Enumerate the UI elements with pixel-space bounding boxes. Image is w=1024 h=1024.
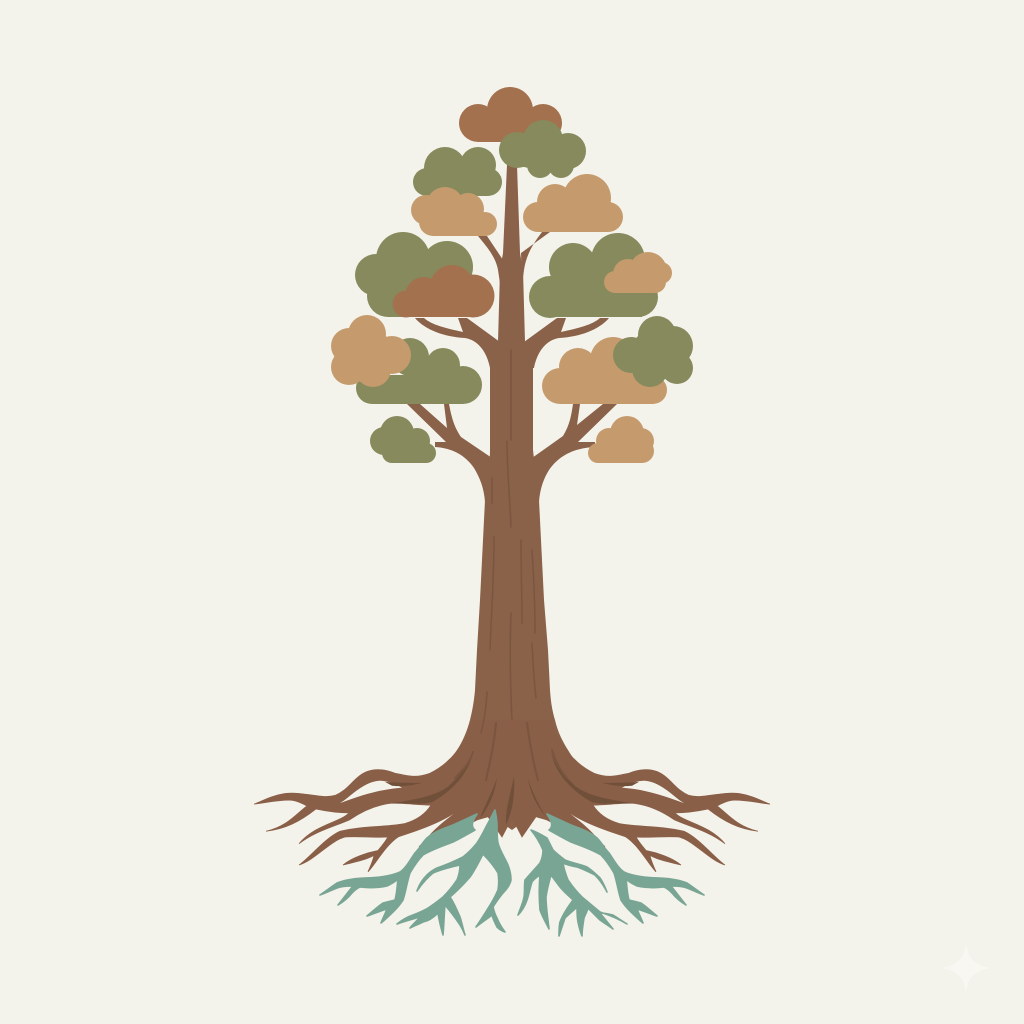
cloud: upper left tan	[411, 187, 497, 236]
root gaps	[340, 781, 684, 803]
root grooves	[385, 752, 639, 824]
branch: upper right	[521, 232, 550, 285]
brown roots right	[512, 720, 770, 872]
canopy	[331, 87, 693, 463]
cloud: bottom right tan	[588, 416, 654, 463]
tree trunk and branches	[407, 165, 617, 830]
cloud: lower left tan	[331, 315, 411, 387]
cloud: top brown	[459, 87, 562, 142]
cloud: bottom left green	[370, 416, 436, 463]
cloud: upper right tan	[523, 174, 623, 232]
teal roots	[320, 810, 704, 936]
teal root: outer right	[547, 814, 704, 923]
cloud: middle right tan	[604, 252, 672, 293]
branch: middle right	[524, 318, 609, 368]
bark lines	[455, 350, 567, 780]
cloud: middle left brown	[392, 265, 494, 318]
cloud: upper left green	[413, 147, 502, 196]
trunk	[433, 165, 587, 830]
teal root: outer left	[320, 814, 477, 923]
cloud: lower left green	[356, 338, 482, 404]
branch: lower right	[532, 404, 617, 502]
cloud: middle right green	[529, 233, 658, 318]
cloud: top green	[499, 120, 586, 178]
brown roots left	[254, 720, 512, 872]
branch: upper left	[478, 236, 503, 290]
cloud: lower right tan	[542, 337, 667, 404]
root system: brown roots	[254, 720, 770, 872]
branch: lower left	[407, 404, 492, 502]
teal root: inner right	[518, 830, 627, 936]
watermark sparkle	[942, 944, 990, 992]
cloud: middle left green	[355, 232, 473, 317]
teal root: inner left	[397, 810, 511, 935]
branch: middle left	[415, 318, 500, 368]
cloud: lower right green	[613, 316, 693, 387]
